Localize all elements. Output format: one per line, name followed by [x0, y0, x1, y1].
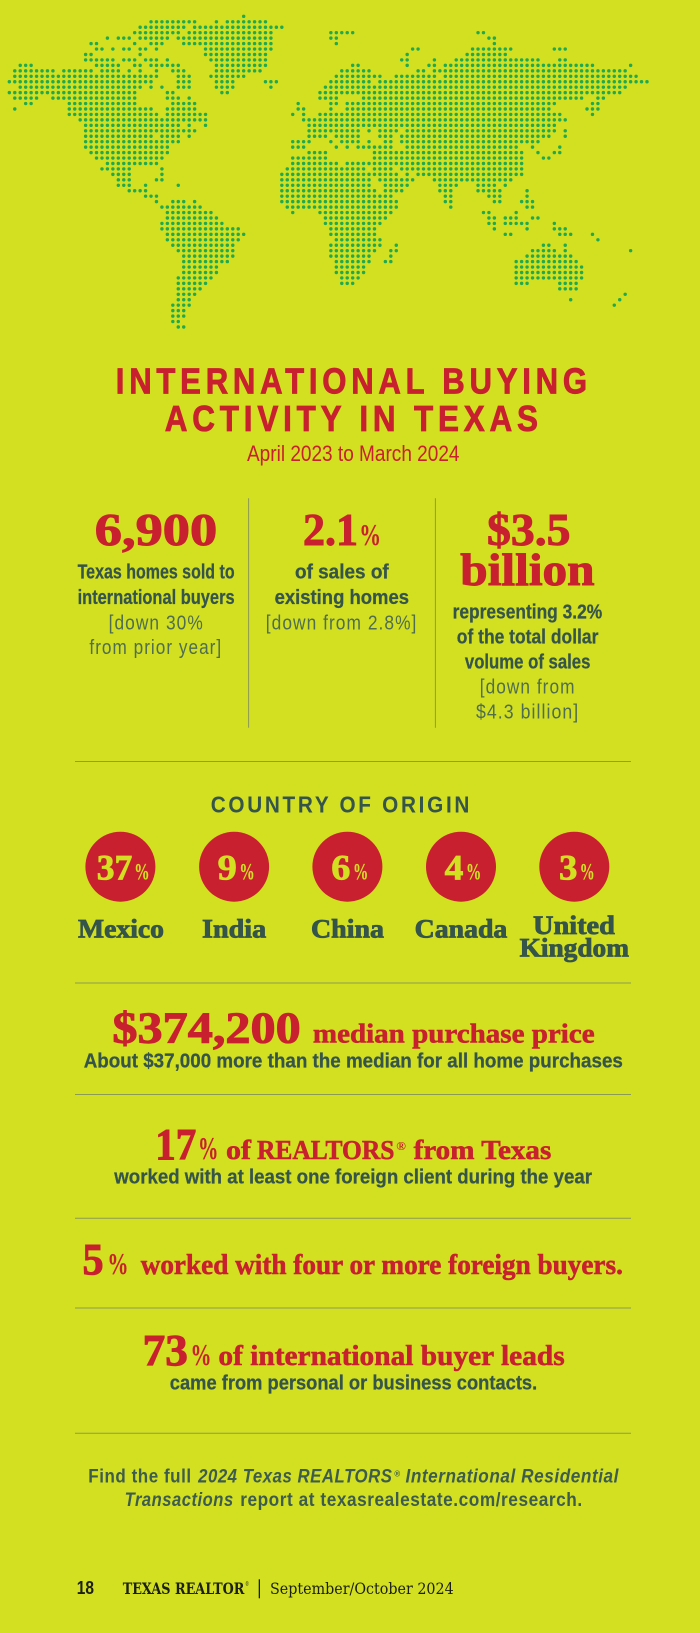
country: India — [199, 832, 269, 944]
stat: homes sold: 6,900 — [95, 505, 217, 555]
stat: median purchase price: $374,200 — [112, 1004, 301, 1053]
stat: homes sold: from prior year] — [89, 637, 222, 659]
stat: dollar volume: volume of sales — [465, 651, 590, 673]
stat: share of sales: of sales of — [295, 562, 389, 584]
country: United Kingdom: % — [580, 859, 595, 884]
stat: homes sold: [down 30% — [109, 612, 204, 634]
stat: homes sold: international buyers — [78, 587, 235, 609]
stat: four or more foreign buyers: 5 — [82, 1235, 104, 1284]
stat: share of sales — [266, 505, 417, 634]
stat: median purchase price — [84, 1004, 623, 1072]
country: Canada: 4 — [445, 847, 463, 887]
country: United Kingdom: United — [533, 911, 615, 940]
country: Canada: % — [466, 859, 481, 884]
stat: buyer leads — [143, 1326, 565, 1394]
subtitle: April 2023 to March 2024 — [247, 441, 460, 466]
country: Canada: Canada — [415, 915, 507, 944]
title: ACTIVITY IN TEXAS — [165, 398, 543, 439]
country: India: 9 — [218, 847, 237, 887]
footer: TEXAS REALTOR — [123, 1579, 244, 1598]
stat: buyer leads: of international buyer leads — [218, 1341, 565, 1372]
stat: dollar volume: $4.3 billion] — [476, 701, 579, 723]
stat: realtors with foreign client: of — [226, 1135, 252, 1165]
call to action: full report — [88, 1467, 619, 1511]
dotted world map — [9, 16, 650, 327]
stat: realtors with foreign client: 17 — [155, 1120, 196, 1169]
country: China: 6 — [331, 847, 350, 887]
country: China: % — [353, 859, 368, 884]
call to action: full report: ® — [394, 1470, 400, 1478]
stat: realtors with foreign client: worked with at least one foreign client during the year — [113, 1166, 592, 1188]
stat: median purchase price: median purchase price — [313, 1019, 595, 1049]
country: Mexico: % — [134, 859, 150, 884]
stat: four or more foreign buyers — [82, 1235, 623, 1284]
stat: realtors with foreign client: ® — [396, 1139, 406, 1153]
footer: ® — [245, 1581, 249, 1588]
stat: buyer leads: came from personal or business contacts. — [170, 1372, 537, 1394]
stat: dollar volume — [453, 505, 602, 723]
stat: share of sales: [down from 2.8%] — [266, 612, 417, 634]
country: United Kingdom — [520, 832, 629, 963]
stat: dollar volume: $3.5 — [487, 505, 570, 555]
stat: realtors with foreign client — [113, 1120, 592, 1188]
call to action: full report: report at texasrealestate.com/research. — [240, 1490, 583, 1511]
stat: four or more foreign buyers: % — [107, 1246, 128, 1281]
call to action: full report: International Residential — [406, 1467, 619, 1488]
stat: dollar volume: [down from — [480, 676, 576, 698]
call to action: full report: Transactions — [125, 1490, 234, 1511]
country: China: China — [311, 915, 384, 944]
stat: median purchase price: About $37,000 more than the median for all home purchases — [84, 1050, 623, 1072]
stat: realtors with foreign client: from Texas — [414, 1135, 551, 1165]
country: India: % — [239, 859, 255, 884]
country: China — [311, 832, 384, 944]
stat: four or more foreign buyers: worked with four or more foreign buyers. — [141, 1250, 623, 1281]
stat: share of sales: 2.1 — [303, 505, 358, 555]
stat: dollar volume: representing 3.2% — [453, 601, 602, 623]
country: Mexico: 37 — [97, 847, 132, 887]
title — [116, 360, 592, 439]
country: Canada — [415, 832, 507, 944]
footer: September/October 2024 — [270, 1580, 454, 1598]
title: INTERNATIONAL BUYING — [116, 360, 592, 402]
stat: realtors with foreign client: % — [198, 1130, 218, 1166]
country: Mexico: Mexico — [78, 915, 164, 944]
footer — [77, 1578, 454, 1598]
stat: share of sales: % — [359, 517, 381, 552]
country: India: India — [202, 915, 266, 944]
country: United Kingdom: Kingdom — [520, 934, 629, 963]
stat: buyer leads: % — [190, 1337, 212, 1372]
heading: country of origin: COUNTRY OF ORIGIN — [211, 791, 472, 817]
country: United Kingdom: 3 — [559, 847, 577, 887]
stat: buyer leads: 73 — [143, 1326, 188, 1375]
footer: 18 — [77, 1578, 94, 1598]
call to action: full report: 2024 Texas REALTORS — [197, 1467, 392, 1488]
country: Mexico — [78, 832, 164, 944]
stat: share of sales: existing homes — [275, 587, 409, 609]
stat: homes sold — [78, 505, 235, 659]
stat: dollar volume: of the total dollar — [457, 626, 599, 648]
stat: realtors with foreign client: REALTORS — [257, 1135, 394, 1165]
stat: homes sold: Texas homes sold to — [78, 562, 235, 584]
call to action: full report: Find the full — [88, 1467, 192, 1488]
stat: dollar volume: billion — [460, 544, 595, 595]
